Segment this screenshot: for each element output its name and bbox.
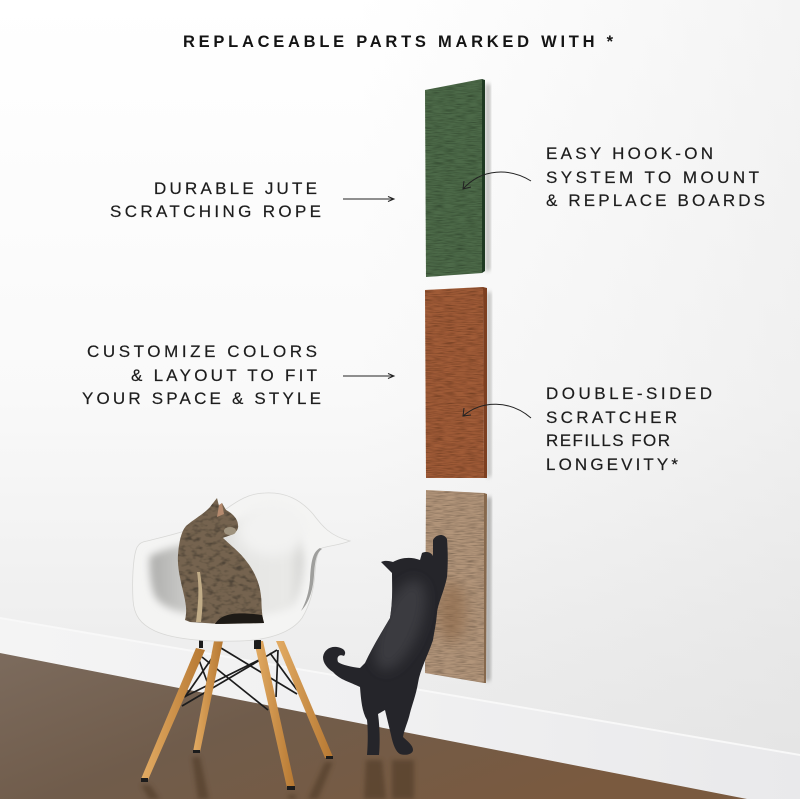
text block: double-sided refills — [546, 384, 712, 474]
icon: tabby cat on chair — [178, 498, 264, 624]
cat muzzle — [224, 527, 236, 535]
text block: double-sided refills: REFILLS FOR — [546, 431, 670, 450]
chair wire base — [182, 648, 297, 710]
scratch wear mark — [438, 582, 466, 642]
heading: REPLACEABLE PARTS MARKED WITH * — [183, 33, 614, 51]
text block: hook-on system: EASY HOOK-ON — [546, 144, 713, 163]
chair legs — [141, 641, 333, 788]
text block: hook-on system — [546, 144, 765, 210]
panel: green scratcher board — [425, 79, 490, 277]
floor — [0, 653, 747, 799]
arrow: hook-on curve — [463, 172, 531, 189]
text block: double-sided refills: DOUBLE-SIDED — [546, 384, 712, 403]
cat tail — [215, 613, 264, 624]
chair back upper light — [238, 504, 306, 556]
chair shell inner shadow — [150, 515, 304, 616]
panel: beige scratcher board — [425, 490, 491, 683]
text block: hook-on system: & REPLACE BOARDS — [546, 191, 765, 210]
text block: customize colors: CUSTOMIZE COLORS — [87, 342, 317, 361]
text block: durable jute: DURABLE JUTE — [154, 179, 317, 198]
baseboard — [0, 618, 800, 799]
baseboard top highlight — [0, 617, 800, 756]
chair shell right shade — [301, 548, 322, 611]
text block: double-sided refills: LONGEVITY* — [546, 455, 678, 474]
arrow: customize — [343, 374, 394, 378]
text block: customize colors: & LAYOUT TO FIT — [131, 366, 317, 385]
panel: orange scratcher board — [425, 287, 491, 478]
cat chest and paw — [196, 572, 203, 622]
arrow: double-sided curve — [463, 404, 531, 418]
text block: customize colors: YOUR SPACE & STYLE — [82, 389, 321, 408]
text block: double-sided refills: SCRATCHER — [546, 408, 677, 427]
text block: hook-on system: SYSTEM TO MOUNT — [546, 168, 759, 187]
chair shell — [133, 493, 350, 641]
chair — [133, 493, 350, 790]
text block: durable jute — [110, 179, 321, 221]
icon: black cat standing — [323, 535, 448, 755]
arrow: jute rope — [343, 196, 394, 202]
text block: customize colors — [82, 342, 321, 408]
black cat fur highlight — [372, 579, 428, 671]
chair leg feet — [141, 640, 333, 790]
cat ear — [217, 503, 224, 517]
floor reflections — [141, 757, 414, 799]
text block: durable jute: SCRATCHING ROPE — [110, 202, 321, 221]
